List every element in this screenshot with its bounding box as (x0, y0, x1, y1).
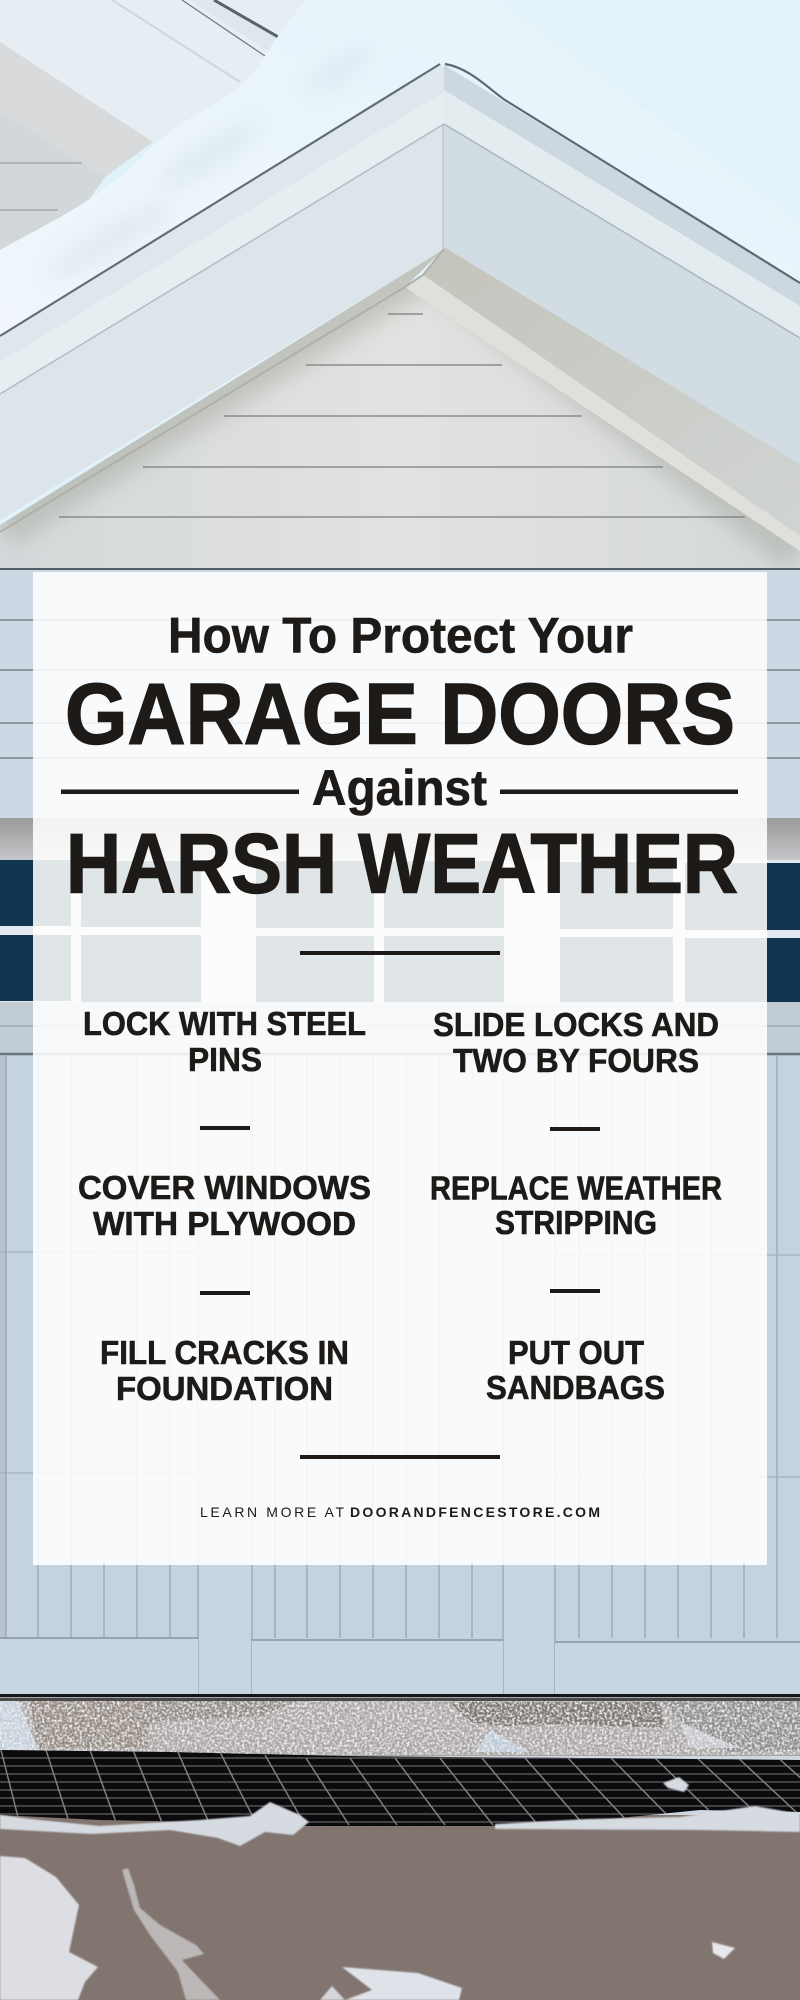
dash right 2 (550, 1289, 600, 1293)
title (61, 608, 738, 910)
tip: replace weather stripping: STRIPPING (495, 1204, 657, 1241)
tip: slide locks and two by fours: TWO BY FOURS (453, 1042, 699, 1079)
divider (300, 951, 500, 955)
dash left 1 (200, 1126, 250, 1130)
wall siding (0, 569, 800, 818)
title rule right (500, 790, 738, 794)
dash left 2 (200, 1291, 250, 1295)
title line: GARAGE DOORS: GARAGE DOORS (65, 666, 735, 762)
title line: Against: Against (312, 760, 487, 816)
tip: lock with steel pins (83, 1005, 366, 1078)
tip: replace weather stripping: REPLACE WEATHER (430, 1170, 722, 1206)
divider (300, 1455, 500, 1459)
door windows (0, 860, 800, 1006)
left roof trim (0, 64, 444, 520)
gable siding (0, 249, 800, 572)
tip: cover windows with plywood: COVER WINDOWS (78, 1169, 371, 1206)
tip: put out sandbags: PUT OUT (508, 1334, 644, 1371)
tip: slide locks and two by fours: SLIDE LOCKS AND (433, 1006, 719, 1043)
tip: cover windows with plywood (78, 1169, 371, 1242)
snow patches (0, 1777, 800, 2000)
tip: fill cracks in foundation (100, 1334, 349, 1407)
tip: replace weather stripping (430, 1170, 722, 1241)
title line: How To Protect Your: How To Protect Your (168, 608, 633, 664)
tip: cover windows with plywood: WITH PLYWOOD (93, 1205, 356, 1242)
footer: learn more: LEARN MORE AT (200, 1504, 344, 1520)
rear gable behind the snow (0, 0, 306, 250)
right roof trim (405, 64, 800, 551)
footer: learn more (200, 1504, 600, 1520)
tip: fill cracks in foundation: FOUNDATION (116, 1370, 333, 1407)
translucent white panel (33, 572, 767, 1565)
title rule left (61, 790, 299, 794)
tip: lock with steel pins: LOCK WITH STEEL (83, 1005, 366, 1042)
tip: put out sandbags (486, 1334, 665, 1406)
footer: learn more: DOORANDFENCESTORE.COM (350, 1504, 600, 1520)
title line: HARSH WEATHER: HARSH WEATHER (66, 816, 738, 910)
ground (0, 1815, 800, 2000)
tip: put out sandbags: SANDBAGS (486, 1369, 665, 1406)
tip: lock with steel pins: PINS (188, 1041, 262, 1078)
door (0, 1002, 800, 1696)
tip: fill cracks in foundation: FILL CRACKS IN (100, 1334, 349, 1371)
dash right 1 (550, 1127, 600, 1131)
sky (0, 0, 800, 580)
header above door (0, 818, 800, 862)
floor grate (0, 1750, 800, 1826)
snow on roof (0, 0, 800, 335)
tip: slide locks and two by fours (433, 1006, 719, 1079)
snow texture shading (38, 37, 380, 290)
concrete threshold with dirty snow (0, 1694, 800, 1756)
